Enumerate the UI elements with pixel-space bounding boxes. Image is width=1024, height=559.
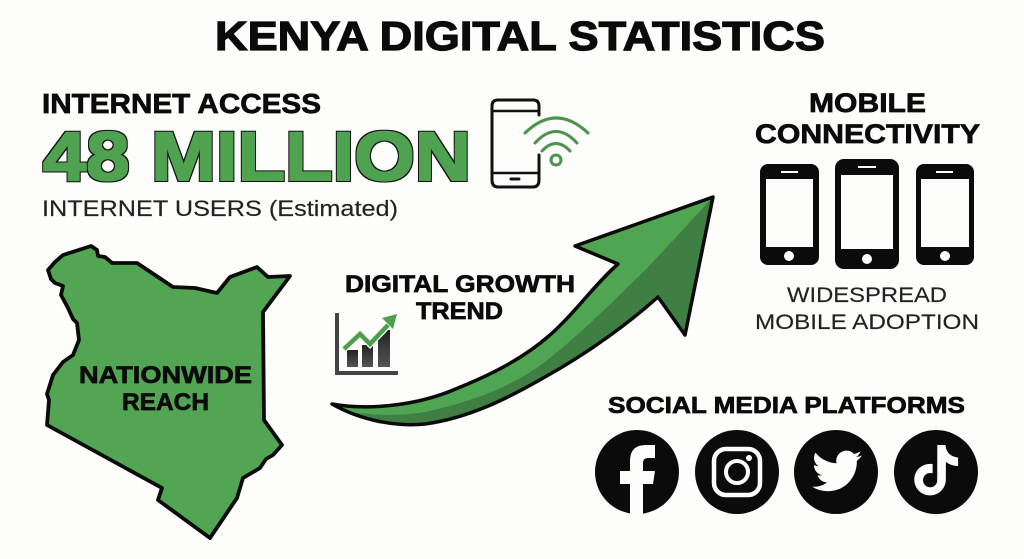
- caption: widespread mobile adoption: MOBILE ADOPTION: [755, 311, 979, 334]
- panel: digital growth trend: [332, 197, 713, 425]
- icon: left phone: [760, 164, 819, 265]
- icon: twitter: [794, 430, 878, 514]
- heading: digital growth trend: [345, 271, 575, 325]
- caption: widespread mobile adoption: [755, 284, 979, 334]
- heading: mobile connectivity: CONNECTIVITY: [755, 119, 980, 149]
- heading: internet access: INTERNET ACCESS: [42, 88, 321, 119]
- heading: digital growth trend: DIGITAL GROWTH: [345, 271, 575, 298]
- heading: social media platforms: SOCIAL MEDIA PLATFORMS: [608, 392, 965, 418]
- icon: growth chart: [337, 313, 398, 373]
- label: nationwide reach: [79, 362, 252, 416]
- heading: digital growth trend: TREND: [416, 298, 503, 325]
- title: KENYA DIGITAL STATISTICS: [215, 13, 825, 59]
- icon: facebook: [595, 430, 679, 514]
- icon: instagram: [695, 430, 779, 514]
- panel: internet access: [42, 88, 588, 221]
- icon: phone with wifi: [492, 100, 588, 187]
- arrow: growth: [332, 197, 713, 425]
- heading: mobile connectivity: [755, 88, 980, 149]
- icon: center phone: [835, 159, 899, 269]
- icon: tiktok: [894, 430, 978, 514]
- label: nationwide reach: NATIONWIDE: [79, 362, 252, 389]
- panel: social media platforms: [595, 392, 978, 514]
- panel: mobile connectivity: [755, 88, 980, 334]
- caption: internet users: INTERNET USERS (Estimated): [42, 196, 398, 221]
- label: nationwide reach: REACH: [122, 389, 209, 416]
- map: Kenya nationwide reach: [47, 246, 290, 538]
- icon: right phone: [916, 164, 974, 265]
- caption: widespread mobile adoption: WIDESPREAD: [787, 284, 947, 307]
- heading: mobile connectivity: MOBILE: [809, 88, 926, 118]
- big number: 48 million: 48 MILLION: [43, 118, 471, 195]
